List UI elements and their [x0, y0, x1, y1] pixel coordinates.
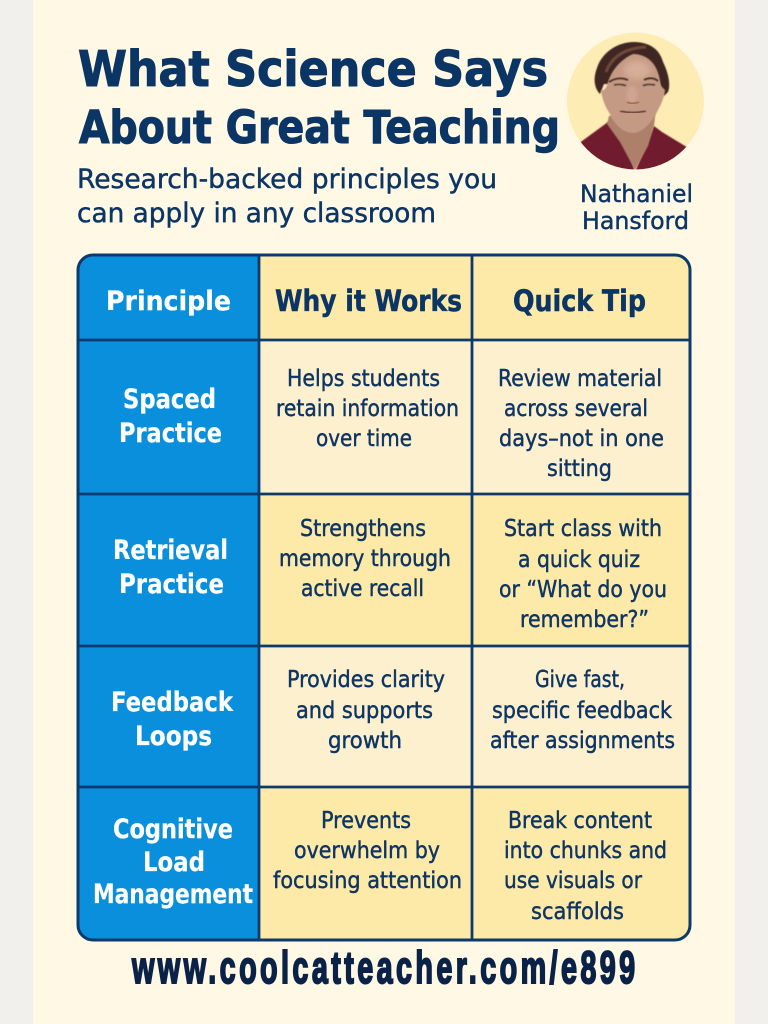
row: spaced practice: Helps students — [287, 366, 440, 392]
row: retrieval practice: Strengthens — [300, 516, 426, 542]
row: retrieval practice: a quick quiz — [518, 547, 640, 573]
row: spaced practice: sitting — [547, 456, 612, 482]
brows — [609, 78, 658, 82]
row: cognitive load management: Prevents — [321, 808, 411, 834]
header row: Why it Works — [275, 284, 462, 318]
header row: Quick Tip — [513, 284, 646, 318]
hair highlight — [606, 47, 646, 72]
row: cognitive load management — [93, 808, 667, 925]
shirt — [580, 122, 687, 170]
row: cognitive load management: into chunks and — [504, 838, 667, 864]
row: feedback loops: growth — [328, 728, 402, 754]
table — [78, 255, 690, 940]
title — [78, 41, 560, 154]
row: retrieval practice: active recall — [301, 576, 424, 602]
row: spaced practice: across several — [504, 396, 648, 422]
header row: Principle — [106, 286, 231, 317]
row: feedback loops: Loops — [135, 721, 212, 752]
row: feedback loops: and supports — [296, 698, 433, 724]
author name — [580, 180, 693, 235]
row: retrieval practice: Practice — [119, 569, 224, 600]
row: cognitive load management: focusing attention — [273, 868, 462, 894]
row: retrieval practice: Start class with — [504, 516, 662, 542]
row: feedback loops: Feedback — [111, 687, 234, 718]
row: feedback loops — [111, 667, 675, 754]
row: feedback loops: Give fast, — [535, 667, 625, 693]
row: spaced practice — [119, 366, 664, 482]
subtitle: Research-backed principles you — [77, 164, 497, 195]
row: feedback loops: after assignments — [490, 728, 675, 754]
row: spaced practice: Spaced — [123, 384, 216, 415]
eyes — [614, 84, 655, 86]
row: retrieval practice: Retrieval — [113, 535, 228, 566]
row: cognitive load management: overwhelm by — [294, 838, 440, 864]
subtitle: can apply in any classroom — [77, 198, 436, 229]
row: cognitive load management: Load — [143, 847, 205, 878]
face — [601, 54, 665, 133]
row: spaced practice: Review material — [498, 366, 662, 392]
header row — [106, 284, 646, 318]
website url: www.coolcatteacher.com/e899 — [131, 944, 639, 994]
row: retrieval practice: remember?” — [520, 607, 649, 633]
forehead light — [624, 61, 650, 79]
row: cognitive load management: use visuals or — [504, 868, 642, 894]
mouth — [620, 111, 646, 112]
portrait photo — [567, 32, 704, 175]
table cell fills — [78, 255, 690, 940]
hair — [595, 42, 669, 96]
nose light — [628, 88, 636, 102]
row: spaced practice: over time — [316, 426, 412, 452]
row: spaced practice: retain information — [276, 396, 459, 422]
row: retrieval practice: or “What do you — [499, 577, 667, 603]
row: spaced practice: Practice — [119, 418, 222, 449]
row: cognitive load management: scaffolds — [531, 899, 624, 925]
title: What Science Says — [78, 41, 548, 98]
neck — [607, 108, 656, 170]
row: retrieval practice: memory through — [279, 546, 451, 572]
title: About Great Teaching — [79, 101, 560, 154]
author name: Hansford — [582, 207, 689, 235]
row: cognitive load management: Management — [93, 879, 253, 910]
row: cognitive load management: Break content — [508, 808, 652, 834]
row: feedback loops: Provides clarity — [287, 667, 445, 693]
row: cognitive load management: Cognitive — [113, 814, 233, 845]
row: feedback loops: specific feedback — [492, 698, 673, 724]
author name: Nathaniel — [580, 180, 693, 208]
subtitle — [77, 164, 497, 229]
row: retrieval practice — [113, 516, 667, 633]
row: spaced practice: days–not in one — [499, 426, 664, 452]
nose — [627, 102, 639, 104]
